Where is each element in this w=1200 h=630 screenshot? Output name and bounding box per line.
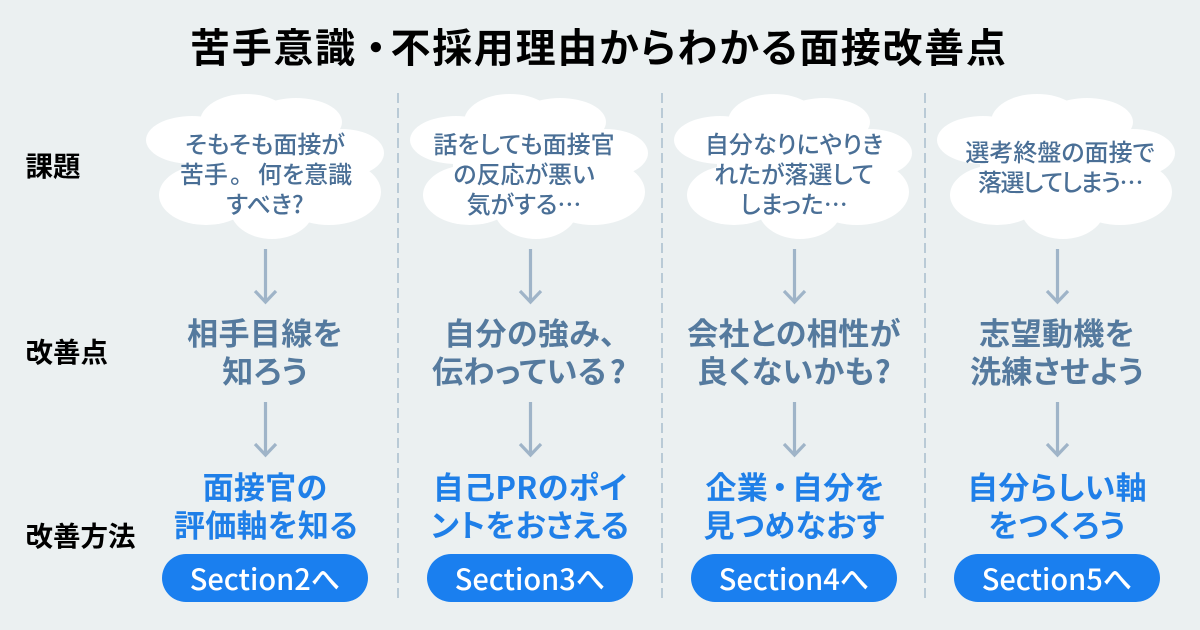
issue text 3: しまった… bbox=[740, 185, 848, 220]
method text 1: 面接官の bbox=[203, 463, 327, 508]
method text 2: 自己PRのポイ bbox=[433, 463, 627, 508]
arrow 1b bbox=[255, 402, 276, 455]
improvement point 2: 自分の強み、 bbox=[444, 309, 616, 354]
button 4: Section5へ bbox=[982, 557, 1132, 599]
issue text 2: の反応が悪い bbox=[453, 155, 595, 190]
row label: 改善方法: 改善方法 bbox=[26, 514, 136, 554]
button 2 bbox=[427, 554, 633, 602]
column 3 bbox=[674, 94, 912, 602]
issue text 1: 苦手。 何を意識 bbox=[180, 155, 352, 190]
issue text 2: 気がする… bbox=[467, 185, 581, 220]
cloud 2 bbox=[410, 94, 648, 239]
improvement point 1: 相手目線を bbox=[187, 309, 343, 354]
improvement point 4: 志望動機を bbox=[979, 309, 1135, 354]
column 4 bbox=[937, 94, 1175, 602]
arrow 2b bbox=[520, 402, 541, 455]
cloud 3 bbox=[674, 94, 912, 239]
method text 3: 企業・自分を bbox=[705, 463, 885, 508]
improvement point 1: 知ろう bbox=[222, 347, 308, 392]
row label: 改善点: 改善点 bbox=[26, 330, 108, 370]
arrow 4b bbox=[1047, 402, 1068, 455]
method text 3: 見つめなおす bbox=[703, 501, 885, 546]
improvement point 2: 伝わっている? bbox=[432, 347, 626, 392]
button 1: Section2へ bbox=[190, 557, 340, 599]
method text 1: 評価軸を知る bbox=[174, 501, 358, 546]
cloud 1 bbox=[146, 94, 384, 239]
issue text 3: れたが落選して bbox=[714, 155, 874, 190]
button 3: Section4へ bbox=[719, 557, 869, 599]
arrow 3b bbox=[784, 402, 805, 455]
improvement point 3: 良くないかも? bbox=[697, 347, 891, 392]
issue text 2: 話をしても面接官 bbox=[433, 125, 615, 160]
button 4 bbox=[954, 554, 1160, 602]
column dividers bbox=[398, 93, 925, 603]
method text 4: 自分らしい軸 bbox=[967, 463, 1147, 508]
title: 苦手意識・不採用理由からわかる面接改善点 bbox=[190, 16, 1008, 74]
arrow 3a bbox=[784, 249, 805, 302]
row label: 課題: 課題 bbox=[26, 144, 80, 184]
issue text 4: 落選してしまう… bbox=[978, 163, 1142, 198]
arrow 1a bbox=[255, 249, 276, 302]
button 2: Section3へ bbox=[455, 557, 605, 599]
method text 2: ントをおさえる bbox=[431, 501, 629, 546]
improvement point 4: 洗練させよう bbox=[970, 347, 1144, 392]
arrow 2a bbox=[520, 249, 541, 302]
issue text 1: すべき? bbox=[226, 185, 304, 220]
issue text 4: 選考終盤の面接で bbox=[965, 133, 1155, 168]
method text 4: をつくろう bbox=[988, 501, 1126, 546]
issue text 3: 自分なりにやりき bbox=[705, 125, 883, 160]
arrow 4a bbox=[1047, 249, 1068, 302]
column 2 bbox=[410, 94, 648, 602]
button 1 bbox=[162, 554, 368, 602]
cloud 4 bbox=[937, 94, 1175, 239]
issue text 1: そもそも面接が bbox=[185, 125, 345, 160]
button 3 bbox=[691, 554, 897, 602]
column 1 bbox=[146, 94, 384, 602]
improvement point 3: 会社との相性が bbox=[687, 309, 901, 354]
